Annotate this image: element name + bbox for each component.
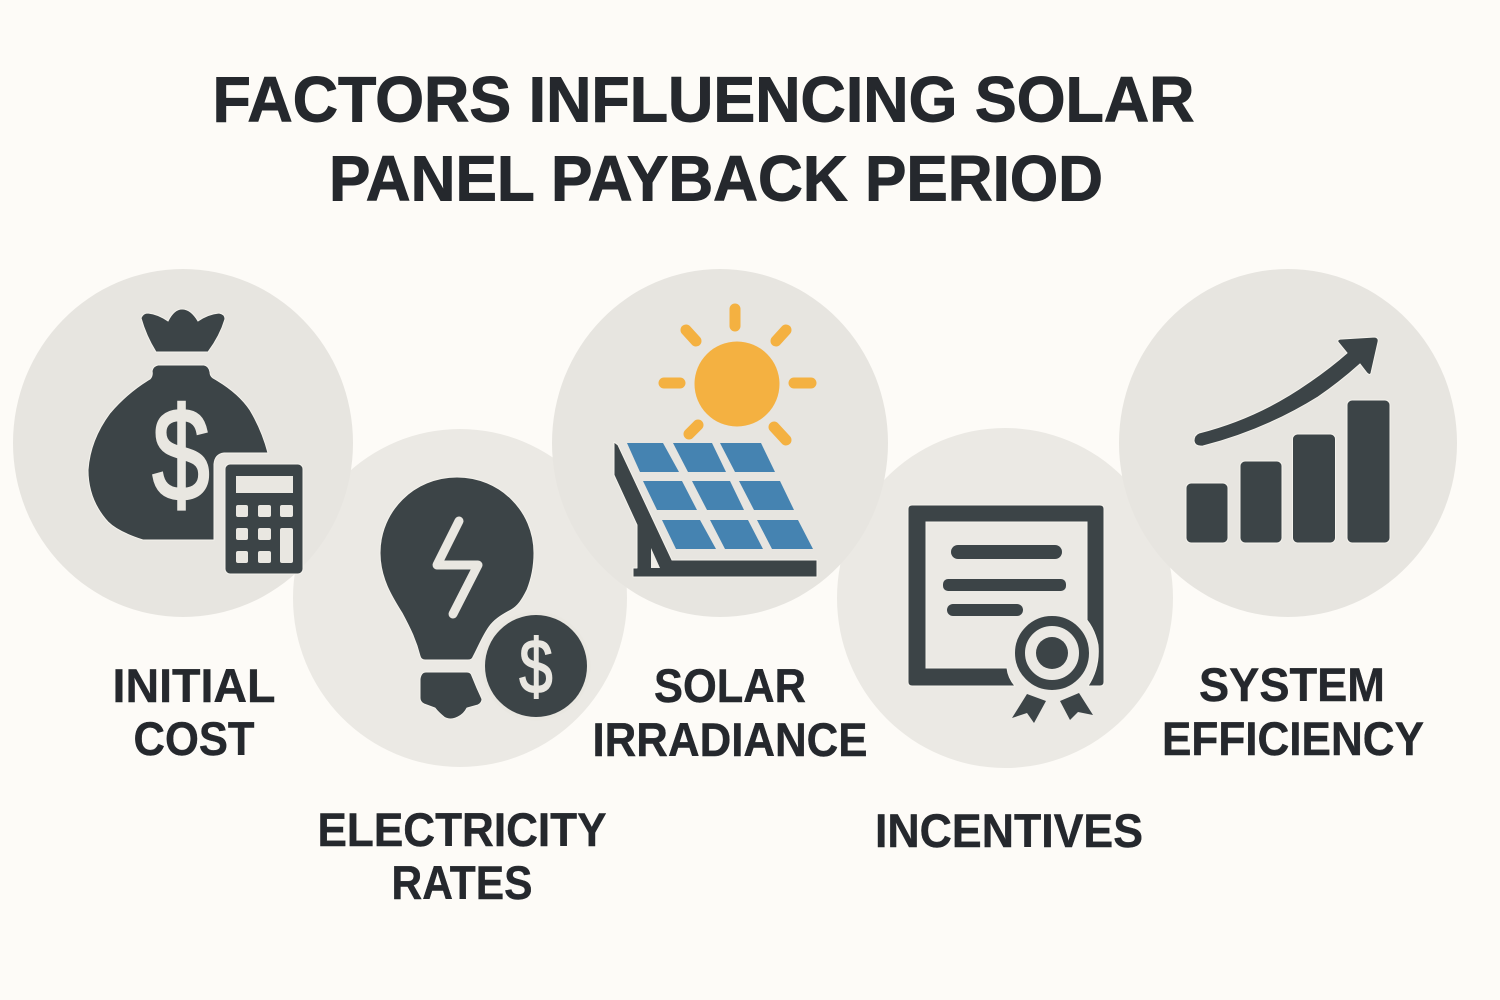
dollar sign: $: [152, 382, 210, 529]
label: system efficiency: SYSTEM: [1199, 658, 1385, 711]
label: initial cost: INITIAL: [112, 659, 276, 712]
label: system efficiency: [1162, 658, 1424, 765]
label: system efficiency: EFFICIENCY: [1162, 712, 1424, 765]
panel: initial cost circle: [13, 269, 353, 617]
icon: certificate with ribbon: [908, 505, 1104, 723]
label: electricity rates: ELECTRICITY: [318, 803, 606, 856]
title: FACTORS INFLUENCING SOLAR: [212, 64, 1194, 136]
title: PANEL PAYBACK PERIOD: [329, 142, 1103, 214]
label: initial cost: [112, 659, 276, 765]
label: electricity rates: RATES: [392, 856, 532, 909]
panel: electricity rates circle: [293, 429, 627, 767]
label: solar irradiance: IRRADIANCE: [592, 713, 868, 766]
icon: sun and solar panel: [614, 309, 817, 577]
panel: incentives circle: [837, 428, 1173, 768]
label: solar irradiance: [592, 659, 868, 766]
label: incentives: INCENTIVES: [875, 804, 1143, 857]
icon: light bulb with dollar coin: [380, 477, 590, 720]
title: [212, 64, 1194, 214]
icon: bar chart with arrow: [1186, 337, 1390, 543]
label: solar irradiance: SOLAR: [654, 659, 806, 712]
panel: system efficiency circle: [1119, 269, 1457, 617]
panel: solar irradiance circle: [552, 269, 888, 617]
label: electricity rates: [318, 803, 606, 909]
icon: money bag with calculator: [88, 309, 303, 574]
label: initial cost: COST: [134, 712, 255, 765]
icon: light bulb with dollar coin: $: [519, 623, 553, 710]
